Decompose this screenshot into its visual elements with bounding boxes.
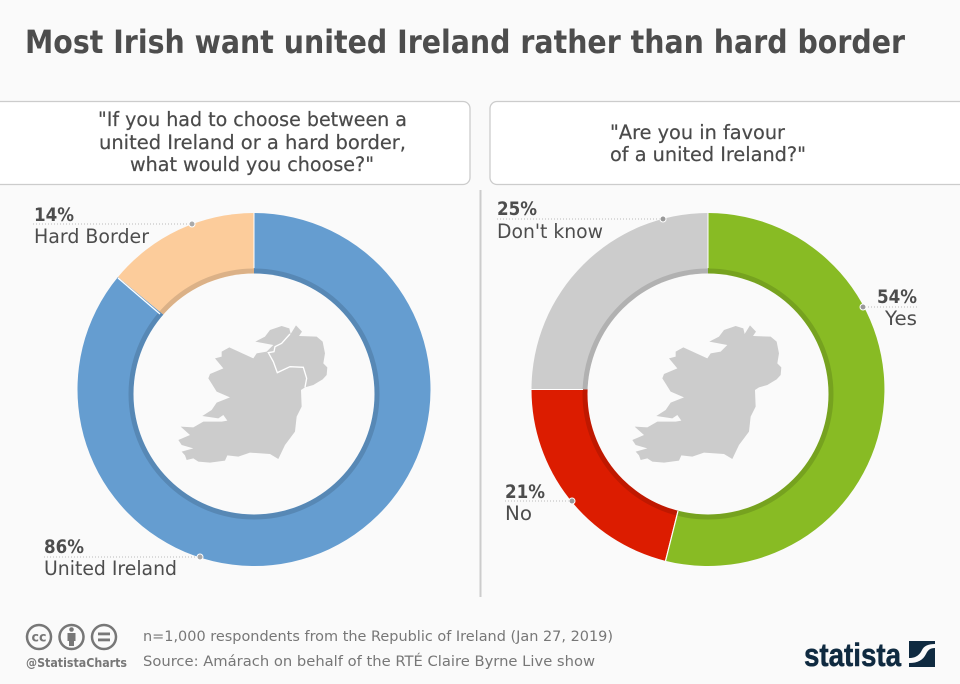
panel: left question: "If you had to choose between a <box>98 108 407 131</box>
label: United Ireland: 86% <box>44 537 84 558</box>
footnote text: n=1,000 respondents from the Republic of Ireland (Jan 27, 2019) <box>143 629 613 645</box>
label: Hard Border: 14% <box>34 205 74 226</box>
label: Hard Border: Hard Border <box>34 225 150 248</box>
panel: left question <box>0 102 470 184</box>
logo: statista: statista <box>804 637 901 673</box>
donut chart: left <box>78 213 430 566</box>
segment: Yes <box>665 213 884 566</box>
icon: creative commons licence: cc <box>32 630 46 646</box>
map: Ireland with border <box>178 325 327 463</box>
label: Yes: 54% <box>877 287 917 308</box>
label: Yes: Yes <box>884 307 917 330</box>
label: No: No <box>505 502 532 525</box>
label: Don't know <box>497 199 666 243</box>
label: United Ireland <box>44 537 203 580</box>
panel: right question <box>490 102 960 184</box>
map: Ireland <box>632 325 781 463</box>
label: Don't know: 25% <box>497 199 537 220</box>
segment: Hard Border <box>118 213 254 390</box>
label: Yes <box>860 287 917 330</box>
credit: StatistaCharts: @StatistaCharts <box>26 656 127 670</box>
panel: right question: "Are you in favour <box>610 121 786 144</box>
segment: United Ireland <box>78 213 430 566</box>
icon: creative commons licence <box>27 625 116 649</box>
panel: right question: of a united Ireland?" <box>610 143 806 166</box>
donut chart: right <box>531 213 884 566</box>
segment: Don't know <box>532 213 708 390</box>
label: Hard Border <box>33 205 195 248</box>
panel: left question: united Ireland or a hard border, <box>99 131 406 154</box>
panel: left question: what would you choose?" <box>130 153 374 176</box>
label: No: 21% <box>505 482 545 503</box>
footnote text <box>143 629 613 670</box>
label: No <box>505 482 575 525</box>
label: United Ireland: United Ireland <box>44 557 177 580</box>
footnote text: Source: Amárach on behalf of the RTÉ Claire Byrne Live show <box>143 653 595 670</box>
segment: No <box>532 390 708 561</box>
label: Don't know: Don't know <box>497 220 603 243</box>
